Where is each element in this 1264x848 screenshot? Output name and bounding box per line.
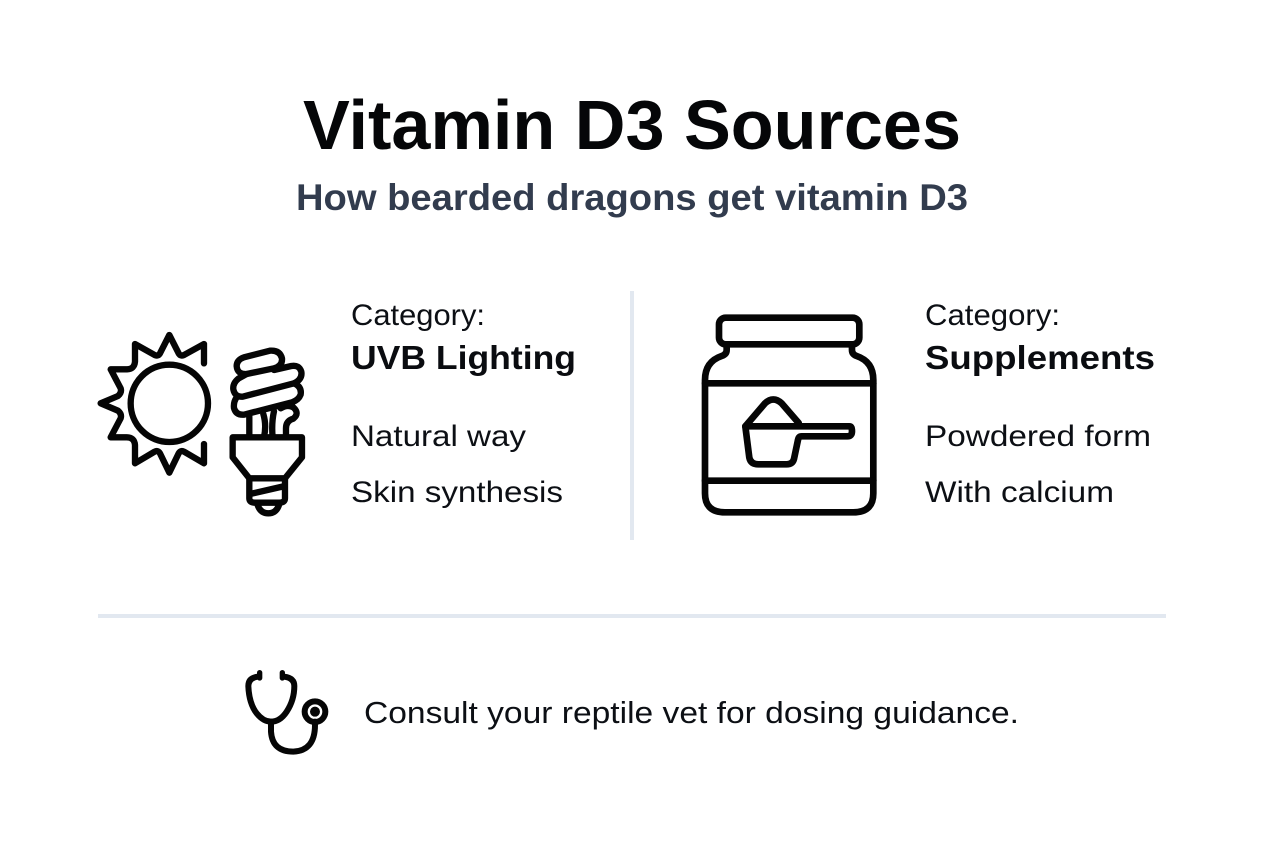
point: natural way: Natural way [351, 420, 526, 453]
footer note [248, 673, 1019, 752]
panel: supplements [705, 299, 1155, 512]
category name: Supplements [925, 339, 1155, 376]
subtitle: How bearded dragons get vitamin D3 [296, 177, 968, 218]
category name: UVB Lighting [351, 339, 576, 376]
icon: supplement jar with scoop [705, 318, 873, 512]
category label: Category: [925, 299, 1060, 332]
panel: UVB lighting [101, 299, 576, 513]
vet advice text: Consult your reptile vet for dosing guidance. [364, 696, 1019, 730]
icon: stethoscope [248, 673, 325, 752]
icon: sun and UVB bulb [101, 335, 302, 513]
category label: Category: [351, 299, 485, 332]
point: powdered form: Powdered form [925, 420, 1151, 453]
point: with calcium: With calcium [925, 476, 1114, 509]
point: skin synthesis: Skin synthesis [351, 476, 563, 509]
title: Vitamin D3 Sources [303, 86, 961, 164]
